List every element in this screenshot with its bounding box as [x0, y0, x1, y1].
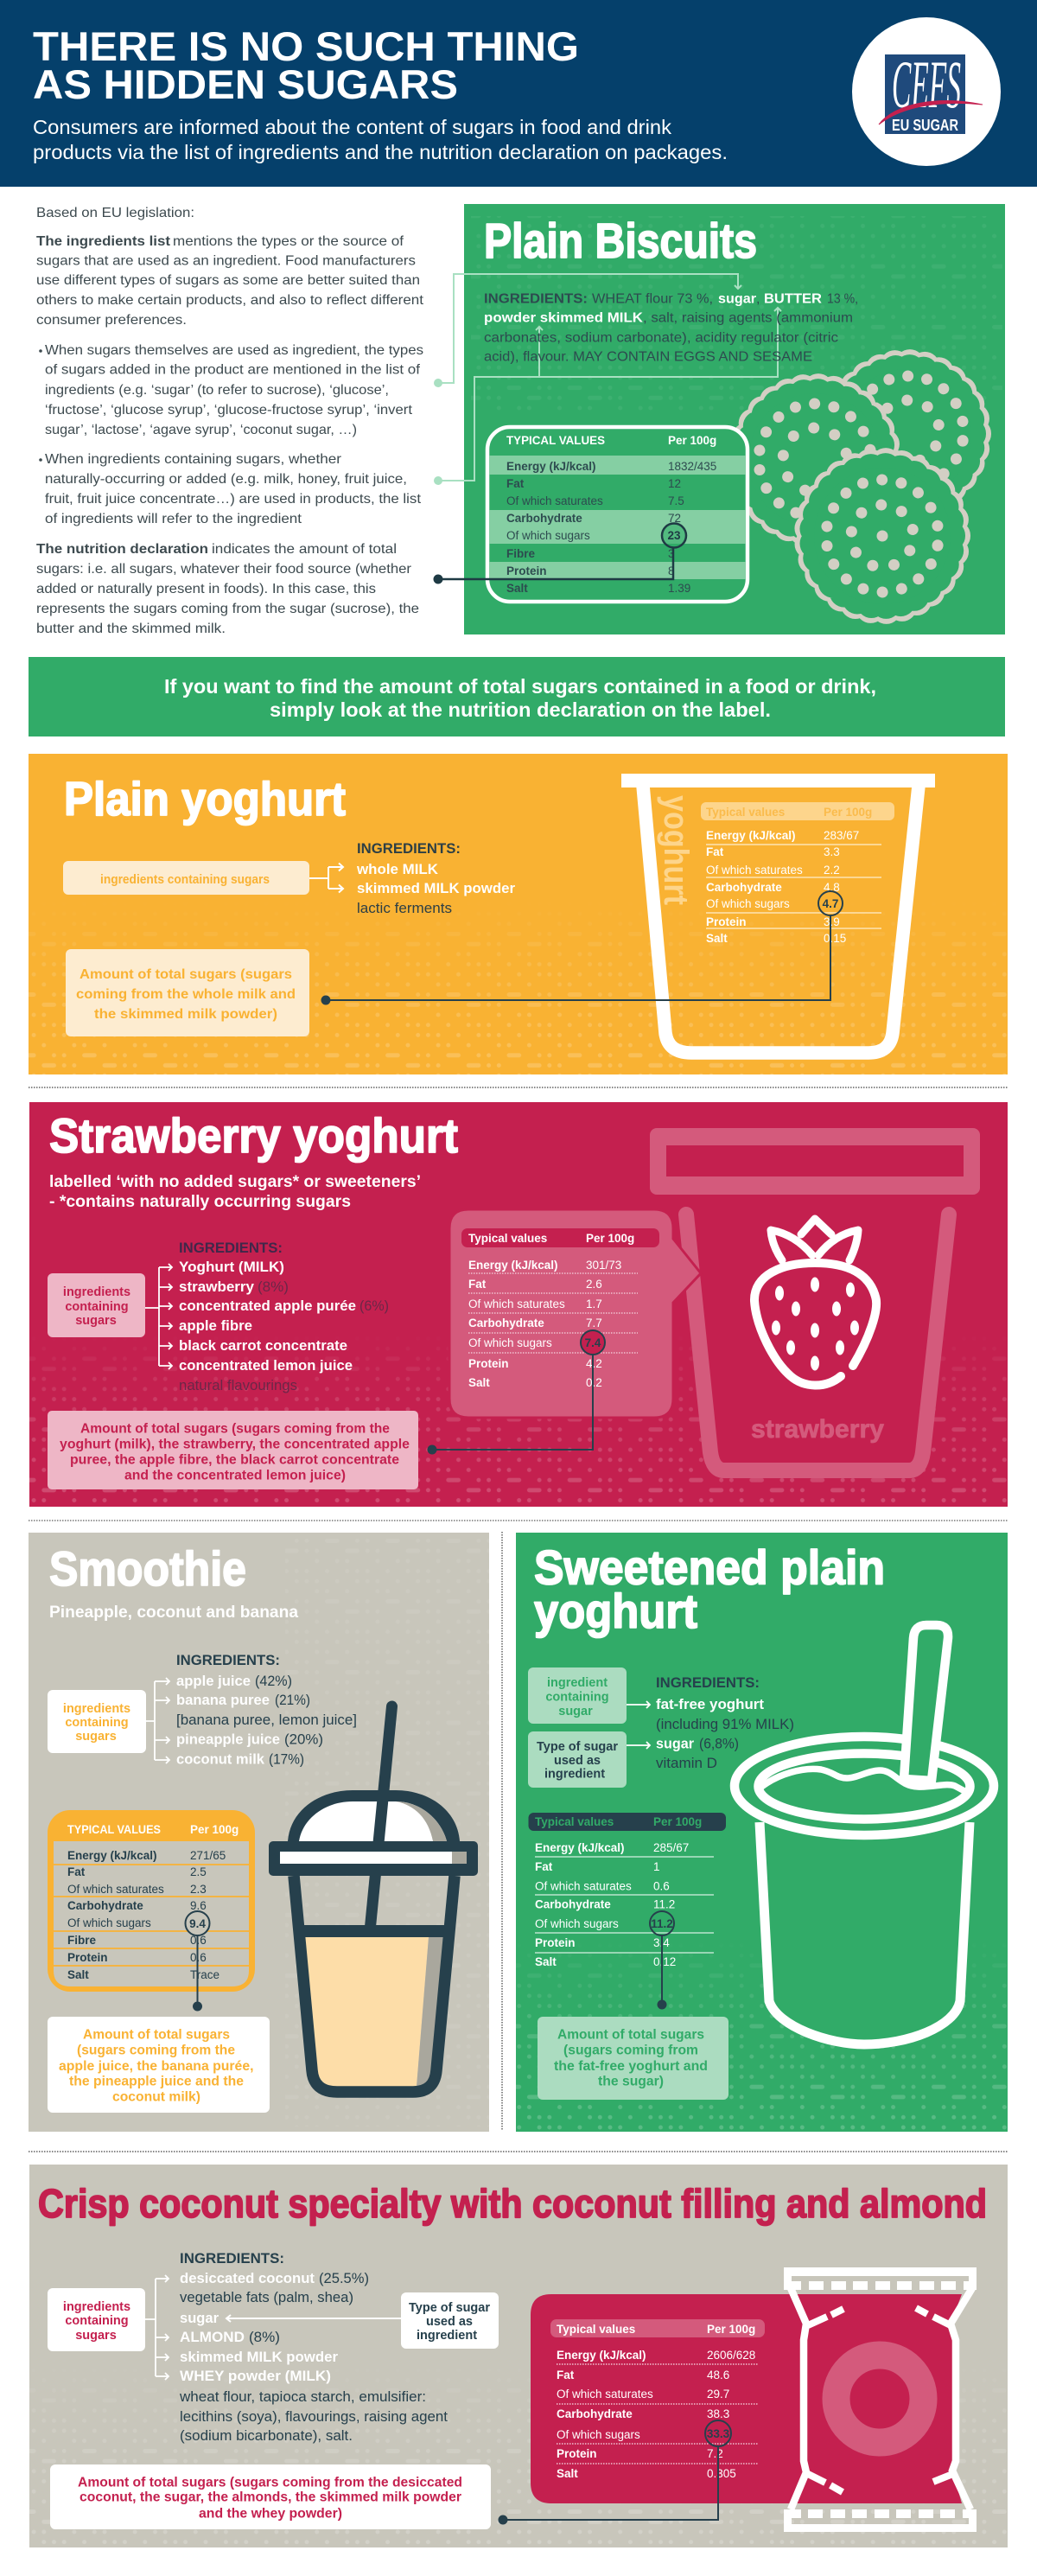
callout: amount of total sugars: and the concentrated lemon juice)	[124, 1468, 346, 1483]
ingredients list: black carrot concentrate	[179, 1337, 347, 1354]
text block: EU legislation explanation: naturally-occurring or added (e.g. milk, honey, fruit juice,	[45, 472, 407, 487]
nutrition table bubble: Of which sugars	[468, 1336, 552, 1349]
icon: smoothie cup	[269, 1706, 478, 2092]
nutrition table: Salt	[535, 1955, 557, 1968]
callout: total sugars line and value	[321, 891, 843, 1004]
icon: yoghurt cup: yoghurt	[657, 795, 695, 905]
label: ingredients containing sugars: sugars	[75, 1730, 117, 1744]
nutrition table	[48, 1810, 255, 1992]
callout: amount of total sugars: Amount of total sugars (sugars coming from the	[80, 1421, 390, 1437]
nutrition table: Of which saturates	[557, 2388, 653, 2401]
nutrition table: 1	[653, 1860, 660, 1873]
text block: EU legislation explanation: others to make certain products, and also to reflect different	[36, 293, 424, 308]
text block: EU legislation explanation: sugars that are used as an ingredient. Food manufacturers	[36, 254, 416, 268]
nutrition table: Typical values	[535, 1815, 614, 1828]
nutrition table: Of which sugars	[557, 2428, 640, 2441]
nutrition table: Carbohydrate	[706, 881, 782, 894]
nutrition table: Carbohydrate	[67, 1899, 143, 1912]
callout: amount of total sugars: (sugars coming from the	[77, 2044, 235, 2057]
nutrition table bubble: Energy (kJ/kcal)	[468, 1259, 558, 1272]
text block: EU legislation explanation: When ingredients containing sugars, whether	[45, 452, 342, 467]
nutrition table: Fat	[706, 845, 724, 858]
ingredients list	[484, 292, 858, 365]
nutrition table: 72	[668, 512, 681, 525]
ingredients list: INGREDIENTS:	[357, 840, 461, 857]
text block: EU legislation explanation: butter and the skimmed milk.	[36, 622, 226, 636]
title: AS HIDDEN SUGARS	[33, 61, 458, 107]
label: ingredient containing sugar	[528, 1667, 627, 1724]
label: ingredients containing sugars	[48, 1690, 146, 1753]
nutrition table: 2606/628	[707, 2349, 755, 2362]
subheading: - *contains naturally occurring sugars	[49, 1193, 351, 1211]
nutrition table: Typical values	[706, 806, 785, 819]
ingredients list: sugar	[656, 1736, 694, 1751]
nutrition table: 7.5	[668, 494, 684, 507]
arrows: to ingredients	[145, 2275, 169, 2380]
nutrition table bubble: 4.2	[586, 1357, 602, 1370]
callout: amount of total sugars: coconut milk)	[112, 2090, 200, 2104]
nutrition table: Per 100g	[668, 434, 716, 447]
nutrition table	[701, 802, 894, 945]
nutrition table: 271/65	[190, 1849, 226, 1862]
heading: sweetened plain yoghurt: yoghurt	[534, 1584, 697, 1638]
nutrition table: 7.2	[707, 2447, 723, 2460]
logo: CEFS EU Sugar	[852, 17, 1001, 166]
ingredients list: INGREDIENTS:	[179, 1240, 283, 1256]
title: THERE IS NO SUCH THING	[33, 23, 579, 69]
callout banner: nutrition declaration: simply look at the nutrition declaration on the label.	[270, 698, 771, 721]
nutrition table: 3.4	[653, 1936, 670, 1949]
text block: EU legislation explanation	[36, 206, 424, 636]
callout: amount of total sugars: Amount of total sugars	[83, 2028, 230, 2042]
text block: EU legislation explanation: When sugars themselves are used as ingredient, the types	[45, 343, 423, 358]
ingredients list: desiccated coconut	[180, 2270, 315, 2286]
ingredients list: pineapple juice	[176, 1731, 280, 1748]
label: ingredients containing sugars: sugars	[75, 1314, 117, 1328]
nutrition table: 2.5	[190, 1865, 207, 1878]
ingredients list: ALMOND	[180, 2329, 245, 2345]
subtitle: Consumers are informed about the content of sugars in food and drink	[33, 116, 672, 138]
nutrition table: Protein	[506, 564, 547, 577]
nutrition table: Of which sugars	[535, 1917, 619, 1930]
text block: EU legislation explanation: added or naturally present in foods). In this case, this	[36, 582, 376, 596]
callout: amount of total sugars	[50, 2464, 491, 2529]
callout: amount of total sugars: yoghurt (milk), the strawberry, the concentrated apple	[60, 1437, 410, 1452]
nutrition table: TYPICAL VALUES	[506, 434, 605, 447]
ingredients list: strawberry	[179, 1278, 255, 1295]
arrows: to ingredients	[146, 1678, 169, 1763]
nutrition table: 12	[668, 477, 681, 490]
label: type of sugar used as ingredient: ingredient	[544, 1767, 605, 1781]
subtitle: products via the list of ingredients and the nutrition declaration on packages.	[33, 141, 728, 163]
nutrition table: 4.8	[824, 881, 840, 894]
nutrition table bubble	[449, 1209, 701, 1418]
label: type of sugar used as ingredient	[401, 2292, 499, 2349]
subheading: Pineapple, coconut and banana	[49, 1604, 298, 1622]
text block: EU legislation explanation: The ingredients list	[36, 234, 171, 249]
nutrition table: 3.9	[824, 915, 840, 928]
text block: EU legislation explanation: ingredients (e.g. ‘sugar’ (to refer to sucrose), ‘glucose’,	[45, 383, 389, 398]
nutrition table: Typical values	[557, 2323, 635, 2336]
callout: total sugars line and value: 9.4	[189, 1917, 206, 1930]
callout: amount of total sugars: apple juice, the banana purée,	[59, 2059, 254, 2074]
text block: EU legislation explanation: use different types of sugars as some are better suited than	[36, 273, 420, 288]
callout: amount of total sugars: and the whey powder)	[199, 2507, 342, 2521]
ingredients list: INGREDIENTS:	[656, 1674, 760, 1691]
nutrition table: 0.6	[190, 1934, 207, 1947]
ingredients list: BUTTER	[764, 292, 822, 306]
nutrition table: 9.6	[190, 1899, 207, 1912]
nutrition table: 11.2	[653, 1898, 675, 1910]
ingredients list: WHEAT flour 73 %,	[592, 292, 713, 306]
label: ingredient containing sugar: ingredient	[547, 1676, 608, 1690]
nutrition table: Of which saturates	[67, 1883, 164, 1896]
title	[33, 23, 579, 107]
ingredients list: INGREDIENTS:	[484, 292, 588, 306]
ingredients list: [banana puree, lemon juice]	[176, 1712, 357, 1728]
ingredients list: WHEY powder (MILK)	[180, 2368, 331, 2384]
icon: strawberry yoghurt pot: strawberry	[751, 1415, 884, 1444]
nutrition table: Energy (kJ/kcal)	[706, 829, 796, 842]
text block: EU legislation explanation: ‘fructose’, ‘glucose syrup’, ‘glucose-fructose syrup’, ‘invert	[45, 403, 413, 418]
label: type of sugar used as ingredient: used as	[426, 2315, 473, 2329]
nutrition table: Carbohydrate	[506, 512, 582, 525]
icon: wrapped snack bar	[531, 2267, 977, 2532]
icon: strawberry	[754, 1219, 876, 1386]
label: ingredients containing sugars: containing	[65, 2314, 129, 2328]
nutrition table: Per 100g	[707, 2323, 755, 2336]
callout: total sugars line and value	[650, 1911, 674, 2009]
text block: EU legislation explanation: Based on EU legislation:	[36, 206, 194, 220]
arrow: ingredients containing sugars connector	[434, 308, 781, 485]
callout: amount of total sugars	[48, 2017, 270, 2113]
label: type of sugar used as ingredient: Type of sugar	[537, 1740, 618, 1754]
callout banner: nutrition declaration: If you want to find the amount of total sugars contained in a food or drink,	[164, 675, 876, 698]
callout banner: nutrition declaration	[29, 657, 1005, 736]
logo: CEFS EU Sugar: EU SUGAR	[892, 117, 958, 134]
nutrition table: Protein	[67, 1951, 108, 1964]
nutrition table: Energy (kJ/kcal)	[557, 2349, 646, 2362]
ingredients list: (42%)	[255, 1673, 292, 1689]
label: ingredients containing sugars: ingredients containing sugars	[100, 873, 270, 887]
nutrition table: Energy (kJ/kcal)	[535, 1841, 625, 1854]
label: type of sugar used as ingredient: Type of sugar	[409, 2301, 490, 2315]
label: type of sugar used as ingredient	[528, 1731, 627, 1788]
text block: EU legislation explanation: sugar’, ‘lactose’, ‘agave syrup’, ‘coconut sugar, …)	[45, 423, 357, 437]
nutrition table bubble: 301/73	[586, 1259, 621, 1272]
nutrition table: Energy (kJ/kcal)	[506, 460, 596, 473]
callout: total sugars line and value: 23	[667, 529, 681, 542]
arrow: sugar connector	[434, 274, 741, 387]
ingredients list: INGREDIENTS:	[176, 1652, 280, 1668]
text block: EU legislation explanation: mentions the types or the source of	[173, 234, 404, 249]
ingredients list: coconut milk	[176, 1751, 265, 1767]
label: ingredient containing sugar: containing	[545, 1691, 609, 1705]
text block: EU legislation explanation: of ingredients will refer to the ingredient	[45, 512, 302, 526]
callout: amount of total sugars: Amount of total sugars	[557, 2028, 704, 2042]
ingredients list: vitamin D	[656, 1755, 717, 1771]
nutrition table: 1.39	[668, 582, 690, 595]
ingredients list: lactic ferments	[357, 900, 452, 916]
nutrition table: 0.6	[653, 1879, 670, 1893]
nutrition table	[529, 1813, 726, 1968]
ingredients list: (8%)	[258, 1278, 289, 1295]
ingredients list	[179, 2250, 448, 2444]
nutrition table: 8	[668, 564, 675, 577]
nutrition table: 0.12	[653, 1955, 676, 1968]
nutrition table: Salt	[557, 2467, 578, 2480]
ingredients list: whole MILK	[356, 861, 439, 877]
nutrition table: Per 100g	[190, 1823, 239, 1836]
ingredients list	[176, 1652, 357, 1767]
text block: EU legislation explanation: represents the sugars coming from the sugar (sucrose), the	[36, 602, 419, 616]
nutrition table: 283/67	[824, 829, 859, 842]
nutrition table: Carbohydrate	[557, 2407, 633, 2420]
callout: amount of total sugars	[538, 2017, 728, 2100]
callout: total sugars line and value: 11.2	[651, 1917, 673, 1930]
callout: amount of total sugars	[66, 949, 309, 1036]
label: ingredients containing sugars: containing	[65, 1300, 129, 1314]
nutrition table: Fibre	[506, 547, 535, 560]
callout: amount of total sugars: coconut, the sugar, the almonds, the skimmed milk powder	[80, 2490, 461, 2505]
heading: sweetened plain yoghurt	[534, 1540, 885, 1638]
heading: plain yoghurt: Plain yoghurt	[64, 772, 346, 826]
panel: strawberry yoghurt	[29, 1102, 1008, 1507]
ingredients list: banana puree	[176, 1692, 270, 1708]
ingredients list: sugar	[718, 292, 756, 306]
arrow: type of sugar to sugar	[226, 2315, 401, 2322]
ingredients list: natural flavourings	[179, 1377, 297, 1393]
callout: total sugars line and value	[498, 2420, 731, 2524]
nutrition table: 48.6	[707, 2369, 729, 2382]
ingredients list: apple juice	[176, 1673, 251, 1689]
callout: amount of total sugars: the skimmed milk powder)	[94, 1007, 277, 1022]
nutrition table: Of which saturates	[706, 864, 803, 877]
ingredients list: lecithins (soya), flavourings, raising agent	[180, 2408, 448, 2425]
nutrition table: Fat	[506, 477, 525, 490]
nutrition table: Fat	[67, 1865, 86, 1878]
callout: total sugars line and value: 7.4	[585, 1336, 601, 1349]
ingredients list: (including 91% MILK)	[656, 1716, 794, 1732]
nutrition table: Protein	[557, 2447, 597, 2460]
text block: EU legislation explanation: of sugars added in the product are mentioned in the list of	[45, 363, 421, 377]
nutrition table bubble: Of which saturates	[468, 1298, 565, 1310]
label: ingredient containing sugar: sugar	[558, 1705, 593, 1718]
nutrition table bubble: Protein	[468, 1357, 509, 1370]
panel: plain biscuits	[434, 204, 1005, 634]
ingredients list: vegetable fats (palm, shea)	[180, 2289, 353, 2305]
callout: amount of total sugars: the fat-free yoghurt and	[554, 2059, 708, 2074]
nutrition table: Of which saturates	[535, 1879, 632, 1893]
label: type of sugar used as ingredient: ingredient	[417, 2329, 477, 2343]
ingredients list: (6,8%)	[699, 1736, 739, 1751]
nutrition table: Trace	[190, 1968, 219, 1981]
nutrition table bubble: 2.6	[586, 1278, 602, 1291]
callout: amount of total sugars	[48, 1411, 418, 1489]
nutrition table: 2.3	[190, 1883, 207, 1896]
callout: total sugars line and value: 4.7	[823, 897, 838, 910]
nutrition table bubble: Salt	[468, 1376, 490, 1389]
ingredients list	[356, 840, 515, 916]
nutrition table: Of which saturates	[506, 494, 603, 507]
ingredients list: INGREDIENTS:	[180, 2250, 284, 2267]
label: ingredients containing sugars: ingredients	[63, 2300, 130, 2314]
ingredients list: acid), flavour. MAY CONTAIN EGGS AND SESAME	[484, 349, 812, 365]
nutrition table: Salt	[706, 932, 728, 945]
callout: amount of total sugars: coming from the whole milk and	[76, 987, 296, 1002]
nutrition table bubble: Per 100g	[586, 1232, 634, 1245]
ingredients list: (25.5%)	[319, 2270, 369, 2286]
ingredients list: ,	[756, 292, 760, 306]
nutrition table bubble: 0.2	[586, 1376, 602, 1389]
ingredients list: (17%)	[269, 1751, 304, 1767]
text block: EU legislation explanation: The nutrition declaration	[36, 542, 208, 557]
ingredients list: carbonates, sodium carbonate), acidity regulator (citric	[484, 330, 838, 346]
ingredients list: concentrated apple purée	[179, 1298, 356, 1314]
heading: plain biscuits: Plain Biscuits	[484, 214, 757, 269]
icon: yoghurt pot with spoon	[735, 1625, 994, 2044]
nutrition table: TYPICAL VALUES	[67, 1823, 161, 1836]
nutrition table: 3	[668, 547, 675, 560]
callout: amount of total sugars: Amount of total sugars (sugars	[80, 967, 292, 982]
nutrition table: Of which sugars	[706, 897, 790, 910]
arrows: to ingredients	[627, 1701, 650, 1749]
nutrition table bubble: Typical values	[468, 1232, 547, 1245]
ingredients list: skimmed MILK powder	[357, 880, 515, 896]
ingredients list	[656, 1674, 794, 1771]
callout: total sugars line and value	[434, 524, 686, 584]
ingredients list: powder skimmed MILK	[484, 311, 643, 325]
nutrition table: Fat	[557, 2369, 575, 2382]
label: ingredients containing sugars: sugars	[75, 2329, 117, 2343]
nutrition table: 2.2	[824, 864, 840, 877]
nutrition table: 0.305	[707, 2467, 736, 2480]
nutrition table: Protein	[706, 915, 747, 928]
nutrition table bubble: 7.7	[586, 1317, 602, 1329]
callout: amount of total sugars: puree, the apple fibre, the black carrot concentrate	[70, 1452, 399, 1468]
callout: total sugars line and value: 33.3	[707, 2427, 730, 2440]
nutrition table: Per 100g	[824, 806, 872, 819]
nutrition table: 29.7	[707, 2388, 729, 2401]
nutrition table: 38.3	[707, 2407, 729, 2420]
nutrition table: 1832/435	[668, 460, 716, 473]
ingredients list: wheat flour, tapioca starch, emulsifier:	[179, 2388, 426, 2405]
ingredients list: (6%)	[359, 1298, 389, 1314]
callout: amount of total sugars: Amount of total sugars (sugars coming from the desiccated	[78, 2476, 462, 2490]
ingredients list: (20%)	[284, 1731, 323, 1748]
nutrition table: Energy (kJ/kcal)	[67, 1849, 157, 1862]
heading: strawberry yoghurt: Strawberry yoghurt	[49, 1108, 458, 1163]
ingredients list: (8%)	[249, 2329, 280, 2345]
nutrition table: Carbohydrate	[535, 1898, 611, 1910]
nutrition table: Salt	[506, 582, 528, 595]
text block: EU legislation explanation: indicates the amount of total	[212, 542, 397, 557]
heading: sweetened plain yoghurt: Sweetened plain	[534, 1540, 885, 1594]
callout: total sugars line and value	[427, 1330, 605, 1454]
icon: strawberry yoghurt pot	[650, 1128, 980, 1470]
arrows: to ingredients	[309, 863, 343, 892]
text block: EU legislation explanation: fruit, fruit juice concentrate…) are used in products, the list	[45, 492, 422, 507]
ingredients list: Yoghurt (MILK)	[179, 1259, 284, 1275]
label: ingredients containing sugars	[48, 1273, 145, 1337]
subtitle	[33, 116, 728, 163]
nutrition table: Of which sugars	[67, 1916, 151, 1929]
icon: biscuits	[743, 364, 977, 609]
ingredients list: , salt, raising agents (ammonium	[643, 311, 853, 325]
nutrition table: Per 100g	[653, 1815, 702, 1828]
nutrition table: Fat	[535, 1860, 553, 1873]
nutrition table	[487, 427, 748, 602]
text block: EU legislation explanation: consumer preferences.	[36, 313, 187, 328]
subheading	[49, 1173, 421, 1211]
ingredients list	[179, 1240, 389, 1393]
nutrition table: Protein	[535, 1936, 576, 1949]
nutrition table: Fibre	[67, 1934, 96, 1947]
callout: amount of total sugars: the sugar)	[598, 2075, 664, 2088]
header banner	[0, 0, 1037, 187]
label: ingredients containing sugars: containing	[65, 1716, 129, 1730]
nutrition table bubble: 1.7	[586, 1298, 602, 1310]
ingredients list: fat-free yoghurt	[656, 1696, 764, 1712]
callout: total sugars line and value	[185, 1911, 209, 2011]
callout: amount of total sugars: the pineapple juice and the	[69, 2075, 244, 2088]
ingredients list: (sodium bicarbonate), salt.	[180, 2427, 353, 2444]
nutrition table: 3.3	[824, 845, 840, 858]
label: ingredients containing sugars: ingredients	[63, 1702, 130, 1716]
label: ingredients containing sugars: ingredients	[63, 1285, 130, 1299]
nutrition table: Of which sugars	[506, 529, 590, 542]
callout: amount of total sugars: (sugars coming from	[563, 2044, 698, 2057]
ingredients list: sugar	[180, 2310, 219, 2326]
ingredients list: 13 %,	[827, 292, 858, 306]
panel: sweetened plain yoghurt	[516, 1533, 1008, 2132]
arrows: to ingredients	[145, 1264, 172, 1369]
ingredients list: skimmed MILK powder	[180, 2349, 338, 2365]
ingredients list: (21%)	[275, 1692, 310, 1708]
nutrition table: 285/67	[653, 1841, 689, 1854]
label: type of sugar used as ingredient: used as	[554, 1754, 601, 1768]
panel: smoothie	[29, 1533, 489, 2132]
nutrition table bubble: Fat	[468, 1278, 487, 1291]
panel: plain yoghurt	[29, 754, 1008, 1074]
nutrition table: 0.6	[190, 1951, 207, 1964]
heading: smoothie: Smoothie	[49, 1541, 246, 1596]
icon: yoghurt cup	[621, 774, 935, 1053]
nutrition table	[550, 2319, 765, 2480]
subheading: labelled ‘with no added sugars* or sweeteners’	[49, 1173, 421, 1191]
nutrition table: Salt	[67, 1968, 89, 1981]
nutrition table: 0.15	[824, 932, 846, 945]
label: ingredients containing sugars	[63, 861, 309, 895]
nutrition table bubble: Carbohydrate	[468, 1317, 544, 1329]
panel: crisp coconut specialty	[29, 2165, 1008, 2547]
ingredients list: concentrated lemon juice	[179, 1357, 353, 1374]
text block: EU legislation explanation: sugars: i.e. all sugars, whatever their food source (whether	[36, 562, 412, 577]
ingredients list: apple fibre	[179, 1317, 252, 1334]
label: ingredients containing sugars	[48, 2288, 145, 2351]
